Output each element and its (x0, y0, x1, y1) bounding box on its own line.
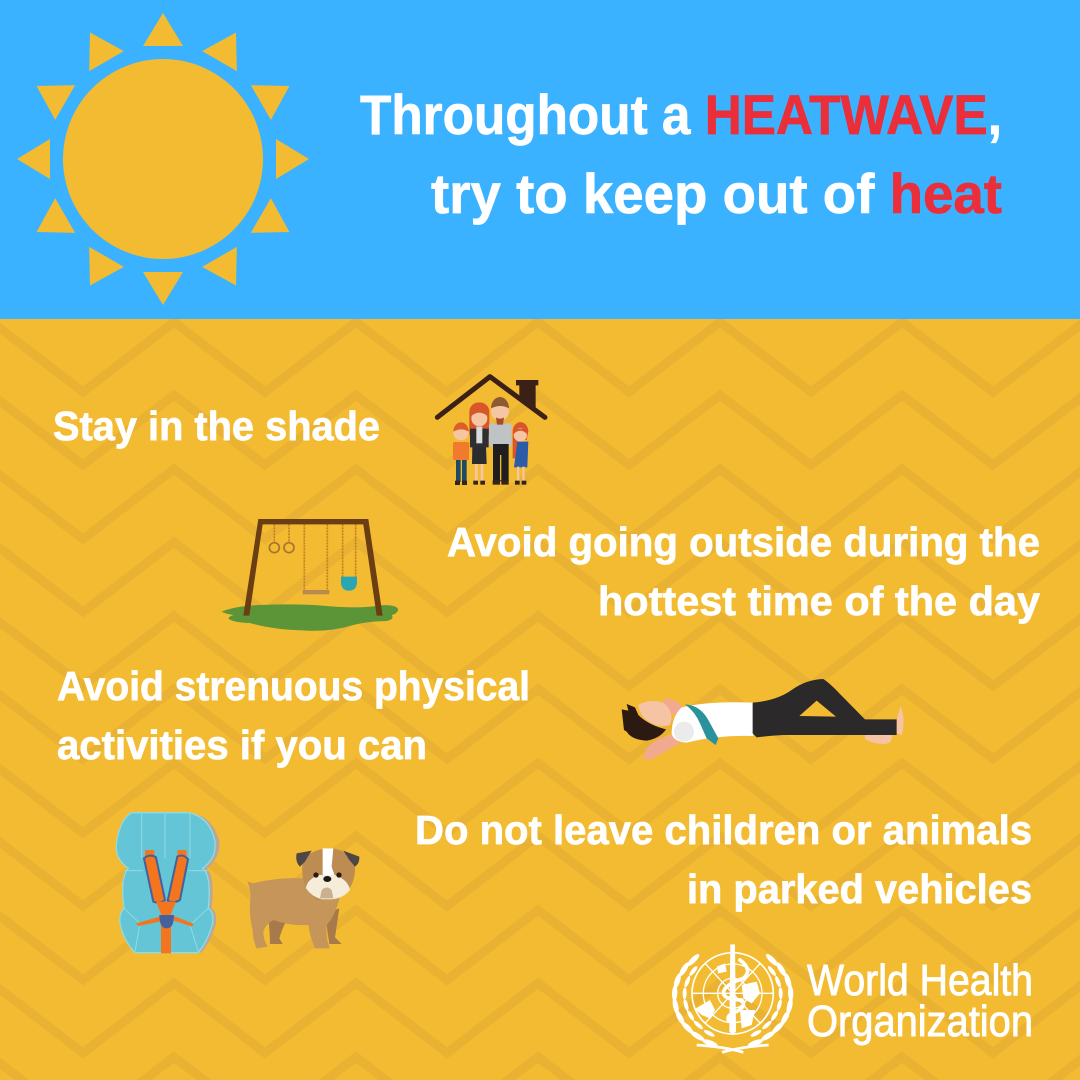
text: avoid going outside: hottest time of the day (598, 578, 1040, 624)
text: do not leave children or animals (415, 807, 1032, 912)
text: do not leave children or animals: in parked vehicles (687, 866, 1032, 912)
text: avoid strenuous activities: Avoid strenuous physical (57, 663, 530, 709)
logo text: World Health Organization: World Health (807, 956, 1033, 1005)
text: do not leave children or animals: Do not leave children or animals (415, 807, 1032, 853)
panel: blue header (0, 0, 1080, 319)
logo: WHO emblem (671, 944, 794, 1052)
text: avoid strenuous activities: activities if you can (57, 722, 427, 768)
icon: sad bulldog (247, 848, 359, 948)
logo text: World Health Organization: Organization (807, 997, 1033, 1046)
icon: sun (17, 13, 309, 305)
icon: playground swing set (222, 519, 398, 631)
text: avoid going outside (447, 519, 1040, 624)
text: stay in the shade: Stay in the shade (53, 403, 380, 449)
text: avoid going outside: Avoid going outside during the (447, 519, 1040, 565)
title: try to keep out of heat (431, 162, 1002, 225)
title (360, 83, 1002, 225)
panel: yellow background (0, 319, 1080, 1080)
title: Throughout a HEATWAVE, (360, 83, 1002, 146)
icon: family in house (437, 377, 545, 485)
logo text: World Health Organization (807, 956, 1033, 1046)
icon: child car seat (116, 813, 219, 953)
text: avoid strenuous activities (57, 663, 530, 768)
icon: man lying down (622, 679, 904, 760)
